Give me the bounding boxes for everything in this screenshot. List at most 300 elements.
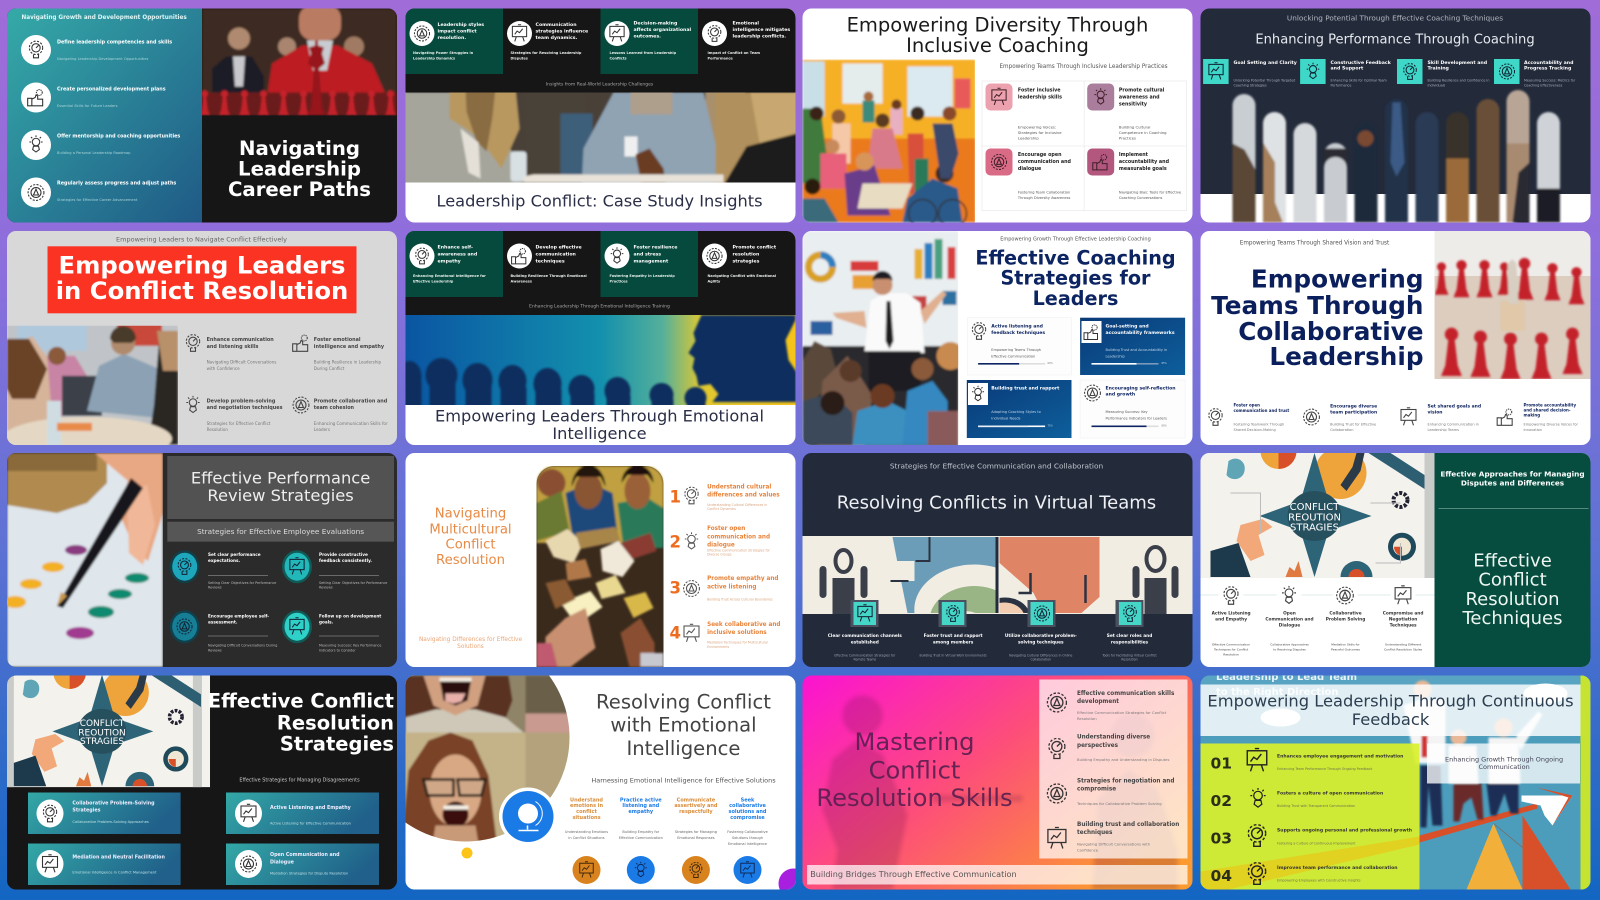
card: trust and rapport: Adapting Coaching Styles to: [991, 410, 1041, 414]
item 3: Leadership Teams: [1428, 428, 1459, 432]
red title banner: [48, 246, 356, 313]
technique 1: Resolution: [1223, 653, 1239, 657]
item: emotional intelligence: During Conflict: [314, 366, 345, 371]
subtitle panel: [167, 522, 394, 542]
list item 3: Offer mentorship and coaching opportunities: [57, 134, 180, 140]
panel title: Conflict: [1478, 569, 1547, 590]
title: Conflict: [869, 756, 960, 784]
cell 4: resolution: [732, 252, 759, 258]
focus item 1: Remote Teams: [853, 658, 877, 662]
lime list panel: [1200, 744, 1420, 890]
bottom caption bar: Building Bridges Through Effective Communication: [810, 869, 1017, 879]
technique 1: Active Listening: [1212, 611, 1251, 617]
item 4: Empowering Diverse Voices for: [1524, 423, 1579, 427]
card: active listening: [968, 318, 1072, 375]
focus item 4: Set clear roles and: [1107, 633, 1152, 639]
practice 1: Foster inclusive: [1018, 88, 1061, 94]
cell 1: Enhancing Emotional Intelligence for: [413, 274, 486, 278]
item: problem solving: [186, 396, 283, 432]
step 3: active listening: [707, 584, 757, 590]
strategy 4: Indicators to Consider: [319, 649, 356, 653]
cell 2: Strategies for Resolving Leadership: [510, 51, 582, 55]
technique 4: Conflict Resolution Styles: [1384, 648, 1423, 652]
focus item 2: Building Trust in Virtual Work Environments: [920, 653, 987, 657]
title: Intelligence: [552, 424, 647, 443]
item: emotional intelligence: Foster emotional: [314, 337, 361, 343]
skill 1: Effective Communication Strategies for Conflict: [1077, 711, 1167, 715]
strategy 2: Reviews: [319, 586, 333, 590]
step 3: 3: [670, 578, 681, 597]
skill 4: Navigating Difficult Conversations with: [1077, 842, 1151, 846]
practice 3: communication and: [1018, 159, 1072, 165]
column 1: [565, 798, 608, 884]
strategy 4: Follow up on development: [319, 614, 381, 619]
item: problem solving: Develop problem-solving: [207, 398, 276, 404]
column 3: respectfully: [679, 809, 713, 815]
strategy 3: [170, 610, 277, 653]
item 1: Shared Decision-Making: [1234, 428, 1276, 432]
strategy 2: Setting Clear Objectives for Performance: [319, 581, 387, 585]
red title banner: Empowering Leaders: [58, 250, 346, 279]
practice 2: Practices: [1119, 136, 1136, 140]
item: collaboration: [293, 397, 388, 432]
focus item 4: [1101, 600, 1157, 662]
panel title: Resolution: [1465, 589, 1560, 610]
technique 4: [1383, 583, 1423, 652]
caption: Navigating Differences for Effective: [419, 637, 522, 643]
column 4: Fostering Collaborative: [727, 830, 768, 834]
green side panel: [1434, 453, 1590, 667]
item 1: Foster open: [1234, 403, 1260, 408]
card 4: Mediation Strategies for Dispute Resolution: [270, 872, 348, 876]
title: Intelligence: [626, 737, 741, 760]
cell 1: impact conflict: [438, 28, 477, 34]
technique 1: Techniques for Conflict: [1213, 648, 1249, 652]
practice 3: dialogue: [1018, 166, 1042, 172]
step 4: Seek collaborative and: [707, 622, 780, 628]
column 4: collaborative: [729, 803, 767, 809]
practice 1: Empowering Voices:: [1018, 124, 1056, 130]
step 1: Understand cultural: [707, 484, 771, 490]
practice 2: Promote cultural: [1119, 88, 1165, 94]
card: active listening: 60%: [1048, 362, 1054, 365]
technique 4: Negotiation: [1389, 617, 1417, 623]
slide 3: Empowering Diversity: [802, 8, 1192, 228]
card 4: [226, 844, 379, 885]
coaching item 2: [1300, 59, 1392, 88]
strategy 1: Setting Clear Objectives for Performance: [208, 581, 276, 585]
cell 4: Impact of Conflict on Team: [708, 51, 760, 55]
cell 3: management: [634, 258, 669, 264]
focus item 3: Navigating Cultural Differences in Online: [1009, 653, 1073, 657]
strategy 4: goals.: [319, 620, 334, 625]
title overlay: Feedback: [1352, 710, 1430, 729]
cell 2: [507, 21, 588, 60]
cell 2: Awareness: [510, 279, 532, 283]
slide 10: Multicultural Conflict Resolution: [406, 453, 796, 667]
slide 1: Navigating Leadership Career Paths: [7, 4, 397, 222]
skill 4: Building trust and collaboration: [1077, 822, 1179, 828]
illustration: inclusive classroom: [802, 60, 975, 222]
feedback item 04: 04: [1210, 867, 1232, 885]
silhouettes in background: [822, 696, 1178, 890]
caption: Empowering Growth Through Effective Leadership Coaching: [1000, 236, 1151, 242]
focus item 1: established: [851, 639, 879, 645]
title overlay: Empowering Leadership Through Continuous: [1207, 692, 1574, 710]
card 4: Open Communication and: [270, 852, 340, 858]
step 1: Conflict Dynamics: [707, 507, 736, 511]
practice 2: Building Cultural: [1119, 124, 1150, 130]
title: Effective Coaching: [975, 246, 1176, 269]
card 2: [226, 792, 379, 834]
focus item 4: Resolution: [1121, 658, 1138, 662]
practice 4: accountability and: [1119, 159, 1170, 165]
panel subheading: Disputes and Differences: [1461, 478, 1564, 487]
step 1: Understanding Cultural Differences in: [707, 503, 767, 507]
photo: hands with puzzle pieces: [536, 466, 664, 667]
coaching item 3: Building Resilience and Confidence in: [1428, 78, 1489, 82]
title: Mastering: [854, 728, 975, 756]
item 3: [1401, 403, 1481, 432]
illustration band: two figures: [802, 536, 1192, 614]
column 2: Practice active: [620, 798, 662, 804]
feedback item 04: Improves team performance and collaboration: [1277, 865, 1398, 871]
white base band: [1200, 194, 1590, 223]
cell 2: Communication: [536, 22, 577, 28]
bottom caption bar: [807, 865, 1188, 884]
cell 3: Decision-making: [634, 20, 677, 26]
column 2: [619, 798, 663, 884]
title: Empowering: [1251, 265, 1424, 294]
cell 3: Foster resilience: [634, 245, 677, 251]
card: self-reflection: 80%: [1162, 424, 1168, 428]
coaching item 4: Measuring Success: Metrics for: [1524, 78, 1576, 82]
cell 2: communication: [536, 252, 576, 258]
focus item 1: Effective Communication Strategies for: [834, 653, 896, 657]
blue globe badge: [499, 788, 557, 846]
cell 2: [507, 244, 587, 283]
background headline fragment: Leadership to Lead Team: [1216, 672, 1357, 683]
skill 2: perspectives: [1077, 743, 1119, 749]
practice 4: Navigating Bias: Tools for Effective: [1119, 190, 1182, 194]
poster image: STRAGIES: [80, 737, 124, 747]
column 4: Seek: [741, 798, 755, 804]
item 2: [1304, 403, 1377, 432]
red title banner: in Conflict Resolution: [56, 276, 348, 305]
column 2: listening and: [622, 803, 660, 809]
list item 4: Regularly assess progress and adjust paths: [57, 180, 176, 186]
technique 2: to Resolving Disputes: [1273, 648, 1306, 652]
technique 3: Mediation Skills for: [1331, 643, 1361, 647]
alternating green cells: [406, 231, 698, 297]
coaching item 4: Accountability and: [1524, 60, 1573, 66]
technique 3: Problem Solving: [1326, 617, 1365, 623]
strategy 1: [170, 550, 276, 590]
column 4: Emotional Intelligence: [728, 842, 767, 846]
slide 12: Conflict Resolution Techniques: [1200, 433, 1590, 667]
cell 3: Conflicts: [610, 56, 627, 60]
coaching item 1: Unlocking Potential Through Targeted: [1234, 78, 1295, 82]
caption: Harnessing Emotional Intelligence for Effective Solutions: [591, 776, 776, 784]
cell 2: techniques: [536, 258, 565, 264]
item 4: and shared decision-: [1524, 408, 1571, 413]
practice 2: [1087, 84, 1167, 140]
focus item 4: Tools for Facilitating Virtual Conflict: [1101, 653, 1157, 657]
cell 4: [702, 244, 777, 283]
column 4: compromise: [730, 815, 765, 821]
title: with Emotional: [610, 714, 757, 736]
card 3: Mediation and Neutral Facilitation: [72, 854, 165, 860]
cell 3: Lessons Learned from Leadership: [610, 51, 677, 55]
team figures on seesaw: [1404, 680, 1542, 828]
feedback item 01: [1210, 749, 1403, 772]
item 2: Collaboration: [1330, 428, 1353, 432]
title: Leadership: [238, 158, 361, 180]
step 1: [670, 484, 780, 511]
title: Conflict: [445, 538, 496, 553]
title: Leadership: [1269, 342, 1424, 371]
list item 1: Navigating Leadership Development Opportunities: [57, 57, 148, 61]
caption: Solutions: [457, 644, 484, 650]
sky backdrop with clouds: [1200, 676, 1590, 736]
item 4: Promote accountability: [1524, 403, 1576, 408]
item: emotional intelligence: [293, 335, 385, 371]
slide 2: Leadership Conflict case study: [400, 8, 800, 222]
focus item 2: Foster trust and rapport: [924, 633, 983, 639]
list item 4: [21, 178, 176, 208]
item 1: communication and trust: [1234, 408, 1289, 413]
photo: red blazer and chess pieces: [202, 8, 397, 116]
title panel: [167, 456, 394, 519]
strategy 2: feedback consistently.: [319, 558, 372, 563]
technique 3: Collaborative: [1329, 611, 1362, 617]
column 2: Building Empathy for: [622, 830, 660, 834]
cell 1: [410, 244, 486, 283]
practice 3: Encourage open: [1018, 152, 1062, 158]
technique 3: Peaceful Outcomes: [1331, 648, 1360, 652]
photo: red figures around leader: [1434, 231, 1590, 379]
title: Strategies: [280, 732, 394, 756]
step 2: Diverse Groups: [707, 553, 732, 557]
technique 4: Understanding Different: [1385, 643, 1422, 647]
poster image: conflict resolution strategies: STRAGIES: [1290, 522, 1339, 533]
photo: workshop: [7, 326, 178, 445]
card 4: Dialogue: [270, 860, 295, 866]
coaching item 4: Progress Tracking: [1524, 66, 1571, 72]
cell 4: [702, 20, 790, 60]
technique 1: and Empathy: [1215, 617, 1247, 623]
cell 4: Emotional: [732, 20, 759, 26]
title: Leaders: [1033, 287, 1118, 310]
item 3: vision: [1428, 410, 1442, 416]
caption: Insights from Real-World Leadership Challenges: [546, 82, 654, 88]
feedback item 01: 01: [1210, 754, 1232, 772]
item: collaboration: Enhancing Communication Skills for: [314, 421, 388, 426]
feedback item 02: 02: [1210, 792, 1232, 810]
card: goal-setting: accountability frameworks: [1106, 330, 1175, 336]
skill 3: Strategies for negotiation and: [1077, 778, 1174, 784]
card: active listening: Active listening and: [991, 324, 1043, 330]
panel title: Techniques: [1461, 608, 1563, 629]
poster image: conflict resolution strategies: REOUTION: [1288, 513, 1341, 524]
photo: pen on checklist: [7, 453, 163, 667]
item: emotional intelligence: intelligence and empathy: [314, 344, 385, 350]
feedback item 01: Enhances employee engagement and motivation: [1277, 754, 1403, 760]
item: problem solving: Resolution: [207, 427, 228, 432]
image: silhouettes against blue-yellow gradient: [406, 315, 796, 405]
coaching item 4: [1494, 59, 1576, 88]
card: active listening: Effective Communication: [991, 355, 1035, 359]
skill 3: [1047, 778, 1174, 806]
column 1: conflict: [576, 809, 597, 815]
coaching item 2: and Support: [1330, 66, 1364, 72]
skill 3: Techniques for Collaborative Problem Solving: [1076, 802, 1162, 806]
focus item 3: [1005, 600, 1077, 662]
card: self-reflection: Encouraging self-reflection: [1106, 385, 1176, 391]
item: emotional intelligence: Building Resilience in Leadership: [314, 360, 382, 365]
focus item 3: Utilize collaborative problem-: [1005, 633, 1077, 639]
technique 2: Communication and: [1265, 617, 1314, 623]
slide 5: Empowering Leaders in Conflict Resolution: [2, 231, 397, 461]
cell 2: Develop effective: [536, 245, 582, 251]
slide 14: Conflict with Emotional Intelligence: [356, 626, 808, 898]
practice 4: measurable goals: [1119, 166, 1167, 172]
cell 1: Enhance self-: [438, 245, 473, 251]
card: active listening: Empowering Teams Through: [991, 348, 1041, 352]
practice 3: Through Diversity Awareness: [1017, 196, 1071, 200]
item: problem solving: Strategies for Effective Conflict: [207, 421, 271, 426]
cell 2: Disputes: [510, 56, 528, 60]
feedback item 03: Fostering a Culture of Continuous Improvement: [1277, 842, 1356, 846]
step 2: 2: [670, 532, 681, 551]
step 2: communication and: [707, 534, 770, 540]
poster image: CONFLICT: [80, 719, 125, 729]
step 1: differences and values: [707, 492, 780, 498]
item 3: Enhancing Communication in: [1428, 423, 1479, 427]
title: Navigating: [239, 137, 360, 160]
coaching item 1: Goal Setting and Clarity: [1234, 60, 1297, 66]
technique 2: [1265, 583, 1314, 652]
step 2: Foster open: [707, 526, 745, 532]
technique 1: Effective Communication: [1212, 643, 1250, 647]
title: Strategies for: [1000, 266, 1151, 290]
slide 13: Conflict Resolution Strategies: [0, 657, 397, 890]
card: goal-setting: Leadership: [1106, 355, 1126, 359]
title: Career Paths: [228, 178, 371, 201]
practice 4: [1087, 148, 1182, 200]
focus item 1: [828, 600, 902, 662]
strategy 1: Set clear performance: [208, 552, 261, 557]
item 4: Innovation: [1524, 428, 1542, 432]
feedback item 03: 03: [1210, 830, 1232, 848]
practice 2: awareness and: [1119, 94, 1160, 100]
cell 1: empathy: [438, 258, 461, 264]
list item 1: [21, 35, 172, 65]
skill 1: [1047, 691, 1175, 721]
poster image: conflict resolution strategies: CONFLICT: [1290, 502, 1340, 513]
skill 4: [1048, 822, 1179, 852]
feedback item 02: Fosters a culture of open communication: [1277, 790, 1383, 796]
item 3: Set shared goals and: [1428, 403, 1481, 409]
slide 15: Mastering Conflict Resolution Skills: [802, 676, 1192, 890]
cell 4: Promote conflict: [732, 245, 777, 251]
caption: Strategies for Effective Communication and Collaboration: [890, 461, 1103, 470]
column 3: Strategies for Managing: [675, 830, 717, 834]
column 2: empathy: [628, 809, 654, 815]
item 2: Encourage diverse: [1330, 403, 1377, 409]
column 4: Solutions through: [732, 836, 763, 840]
title: Empowering Leaders Through Emotional: [435, 406, 764, 426]
focus item 4: responsibilities: [1111, 639, 1149, 645]
background headline fragment: to the Right Direction: [1216, 687, 1339, 698]
cell 3: Fostering Empathy in Leadership: [610, 274, 675, 278]
step 1: 1: [670, 487, 681, 506]
technique 2: Collaborative Approaches: [1270, 643, 1309, 647]
title: Enhancing Performance Through Coaching: [1255, 32, 1535, 48]
title: Inclusive Coaching: [906, 34, 1089, 57]
cell 4: leadership conflicts.: [732, 34, 786, 40]
card 1: Collaborative Problem-Solving Approaches: [72, 820, 149, 824]
step 2: dialogue: [707, 542, 735, 548]
card: self-reflection: [1080, 380, 1185, 438]
title: Empowering Diversity Through: [847, 14, 1148, 36]
feedback item 02: [1210, 788, 1383, 810]
slide 7: Effective Coaching Strategies: [802, 231, 1192, 446]
card: trust and rapport: [967, 380, 1072, 438]
practice 4: Coaching Conversations: [1119, 196, 1163, 200]
faint arrow in lime panel: [1200, 836, 1420, 890]
item: communication: and listening skills: [207, 344, 259, 350]
strategy 1: Reviews: [208, 586, 222, 590]
feedback item 03: Supports ongoing personal and professional growth: [1277, 828, 1412, 834]
card: self-reflection: Performance Indicators for Leaders: [1106, 416, 1167, 420]
panel subheading: Effective Approaches for Managing: [1440, 470, 1585, 479]
poster image: REOUTION: [78, 729, 126, 739]
title: Leadership Conflict: Case Study Insights: [436, 192, 763, 210]
coaching item 1: Coaching Strategies: [1234, 84, 1267, 88]
skill 3: compromise: [1077, 786, 1116, 792]
photo: meeting table: [406, 92, 796, 182]
poster image: conflict resolution strategies: [1200, 453, 1434, 578]
strategy 3: Encourage employee self-: [208, 614, 269, 619]
cell 4: intelligence mitigates: [732, 27, 790, 33]
cell 3: outcomes.: [634, 34, 661, 40]
skills panel: [1039, 680, 1188, 858]
list item 2: [21, 82, 166, 112]
cell 2: Building Resilience Through Emotional: [510, 274, 587, 278]
coaching item 3: Skill Development and: [1428, 60, 1487, 66]
cell 1: [410, 21, 484, 60]
step 4: 4: [670, 624, 681, 643]
list item 2: Essential Skills for Future Leaders: [57, 104, 118, 108]
strategy 3: Navigating Difficult Conversations During: [208, 644, 277, 648]
column 3: [674, 798, 718, 884]
coaching item 3: Individuals: [1428, 84, 1446, 88]
cell 1: Leadership styles: [438, 22, 484, 28]
practice 2: Competence in Coaching: [1119, 130, 1167, 135]
title: Multicultural: [429, 522, 512, 537]
poster image: [7, 676, 210, 788]
cell 2: strategies influence: [536, 28, 588, 34]
card 1: [28, 792, 181, 834]
title: Resolution: [277, 712, 394, 734]
title panel: Review Strategies: [207, 486, 354, 505]
feedback item 01: Enhancing Team Performance Through Ongoing Feedback: [1277, 767, 1372, 771]
column 1: Understand: [570, 798, 603, 804]
step 3: Building Trust Across Cultural Boundaries: [707, 597, 773, 601]
circular photo: shouting women: [356, 626, 576, 852]
practice 1: [986, 84, 1062, 140]
